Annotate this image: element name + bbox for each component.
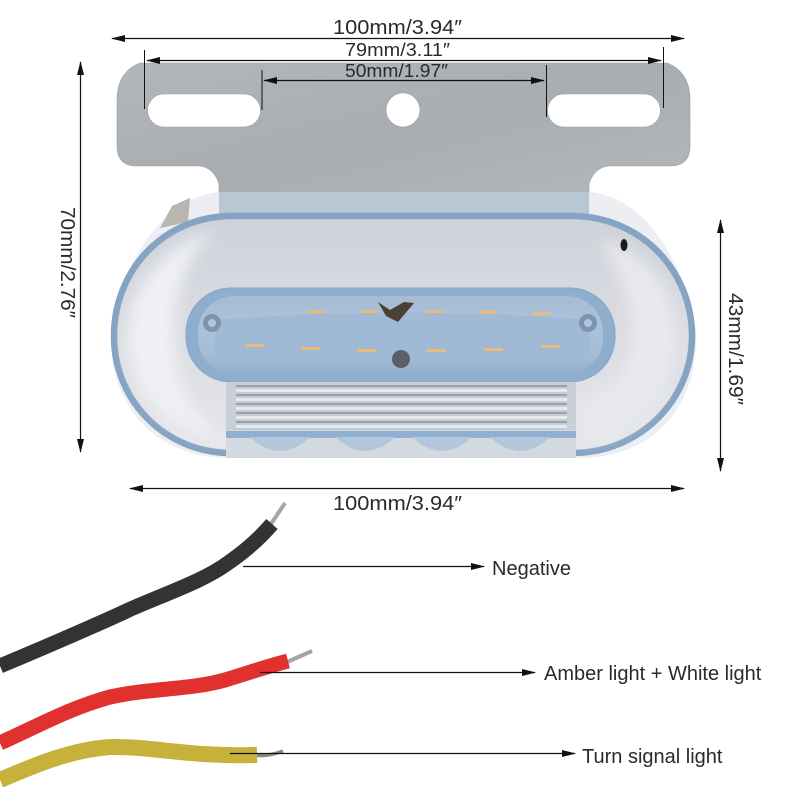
leader: amber + white: Amber light + White light [544,663,762,685]
outer lens [111,192,696,458]
lens rim [114,216,692,453]
dimension: lens height right: 43mm/1.69″ [724,293,746,405]
dimension: width bottom: 100mm/3.94″ [333,493,462,515]
leader: negative: Negative [492,558,571,580]
left face highlight [128,232,226,440]
dimension: 79mm hole span: 79mm/3.11″ [345,39,450,60]
dimension: height left: 70mm/2.76″ [56,207,78,318]
dark speck [620,239,628,251]
dimension: overall width top: 100mm/3.94″ [333,17,462,39]
leader: turn signal: Turn signal light [582,746,723,768]
reflector surround [226,382,576,432]
lower LED strip [226,430,576,458]
ribbed reflector [236,385,567,430]
lamp body [111,192,696,458]
right face highlight [580,240,676,442]
black wire [0,503,285,666]
inner LED window [186,288,615,382]
red wire [0,651,312,743]
bracket plate [117,63,690,200]
yellow wire [0,747,283,780]
dimension: 50mm slot span: 50mm/1.97″ [345,60,448,81]
